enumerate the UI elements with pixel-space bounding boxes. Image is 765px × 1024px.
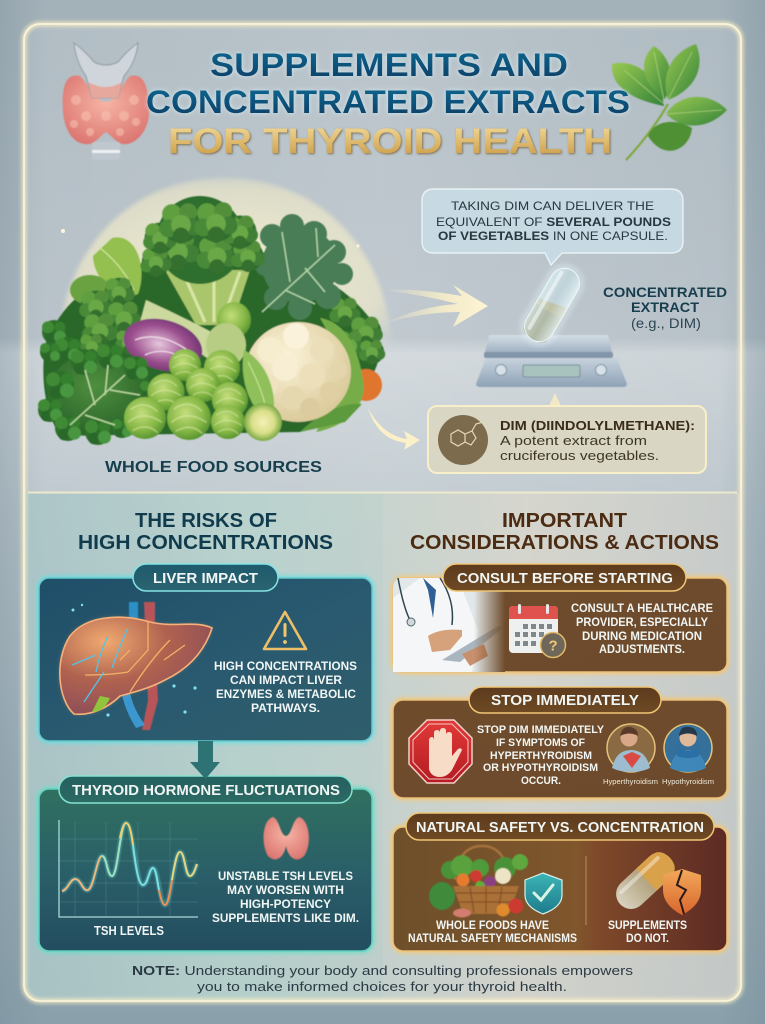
natural text: NATURAL SAFETY MECHANISMS <box>408 933 577 945</box>
heading: risks: THE RISKS OF <box>135 510 277 532</box>
consult pill: CONSULT BEFORE STARTING <box>457 571 673 587</box>
natural text <box>408 920 577 945</box>
heading: risks: HIGH CONCENTRATIONS <box>78 532 333 554</box>
stop text <box>477 724 605 787</box>
thyroid text: UNSTABLE TSH LEVELS <box>218 871 353 883</box>
consult text <box>571 603 713 656</box>
consult text: PROVIDER, ESPECIALLY <box>576 617 708 629</box>
consult pill <box>443 564 686 591</box>
stop text: IF SYMPTOMS OF <box>496 737 585 749</box>
title: SUPPLEMENTS AND <box>210 47 568 83</box>
natural pill: NATURAL SAFETY VS. CONCENTRATION <box>416 820 704 836</box>
thyroid text: MAY WORSEN WITH <box>227 885 344 897</box>
panel: natural safety vs concentration <box>393 813 727 951</box>
panel: thyroid hormone fluctuations <box>39 789 372 951</box>
concentrated extract label: (e.g., DIM) <box>631 315 701 331</box>
icon: calendar <box>509 604 566 658</box>
glow dome <box>58 178 392 350</box>
arrow: liver to thyroid <box>190 741 220 779</box>
icon: safety shield <box>525 873 562 914</box>
liver text: HIGH CONCENTRATIONS <box>214 661 357 673</box>
title <box>146 47 630 161</box>
TSH chart <box>59 820 198 917</box>
concentrated extract label: EXTRACT <box>631 299 699 315</box>
consult text: ADJUSTMENTS. <box>599 644 685 656</box>
liver impact pill <box>133 564 278 591</box>
whole food label: WHOLE FOOD SOURCES <box>105 459 322 476</box>
panel: lower right tint <box>383 493 740 1000</box>
supplements text: DO NOT. <box>626 933 669 945</box>
note: NOTE: Understanding your body and consulting professionals empowers <box>132 963 634 978</box>
natural pill <box>406 813 714 840</box>
stop text: OR HYPOTHYROIDISM <box>483 762 598 774</box>
symptom labels: Hypothyroidism <box>662 779 714 786</box>
stop text: STOP DIM IMMEDIATELY <box>477 724 605 736</box>
cauliflower <box>316 318 364 432</box>
icon: thyroid anatomy <box>63 43 149 160</box>
stop text: OCCUR. <box>521 775 561 787</box>
panel: liver impact <box>39 564 372 741</box>
icon: green leaves <box>612 44 727 160</box>
supplements text: SUPPLEMENTS <box>608 920 687 932</box>
concentrated extract label: CONCENTRATED <box>603 284 727 300</box>
speech bubble: TAKING DIM CAN DELIVER THE <box>451 199 654 213</box>
DIM callout <box>428 393 706 473</box>
section divider <box>28 492 737 494</box>
speech bubble <box>422 189 683 265</box>
sparkles <box>61 229 65 233</box>
icon: thyroid <box>264 817 309 859</box>
consult text: DURING MEDICATION <box>582 631 702 643</box>
thyroid text: HIGH-POTENCY <box>240 899 331 911</box>
icon: kitchen scale <box>476 335 627 387</box>
panel: consult before starting <box>393 564 727 672</box>
note <box>132 963 634 994</box>
heading: considerations: CONSIDERATIONS & ACTIONS <box>410 532 719 554</box>
DIM callout: cruciferous vegetables. <box>500 448 659 463</box>
symptom labels: Hyperthyroidism <box>603 779 658 786</box>
thyroid pill <box>59 776 352 803</box>
brussels sprouts <box>169 349 201 381</box>
liver text: PATHWAYS. <box>251 703 320 715</box>
heading: considerations <box>410 510 719 554</box>
supplements text <box>608 920 687 945</box>
whole food vegetables illustration <box>38 178 392 445</box>
liver impact pill: LIVER IMPACT <box>153 571 258 587</box>
carrot <box>350 369 382 401</box>
natural text: WHOLE FOODS HAVE <box>436 920 549 932</box>
icon: broken shield <box>663 869 701 915</box>
stop text: HYPERTHYROIDISM <box>490 750 592 762</box>
liver text <box>214 661 357 715</box>
heading: considerations: IMPORTANT <box>502 510 627 532</box>
title: CONCENTRATED EXTRACTS <box>146 84 630 120</box>
thyroid pill: THYROID HORMONE FLUCTUATIONS <box>72 783 340 799</box>
panel: stop immediately <box>393 687 727 798</box>
icon: hypothyroidism person <box>664 724 712 772</box>
speech bubble: EQUIVALENT OF SEVERAL POUNDS <box>436 215 671 229</box>
thyroid text <box>212 871 359 925</box>
icon: calendar: ? <box>548 638 558 654</box>
thyroid text: SUPPLEMENTS LIKE DIM. <box>212 913 359 925</box>
icon: DIM molecule <box>438 415 488 465</box>
concentrated extract label <box>603 284 727 331</box>
panel divider <box>586 856 587 925</box>
icon: warning triangle <box>264 612 306 649</box>
speech bubble: OF VEGETABLES IN ONE CAPSULE. <box>438 229 668 243</box>
icon: supplement capsule <box>610 847 680 915</box>
DIM callout: A potent extract from <box>500 433 647 448</box>
curved arrow: vegetables to DIM <box>368 408 420 450</box>
note: you to make informed choices for your thyroid health. <box>197 979 567 994</box>
icon: hyperthyroidism person <box>607 724 655 772</box>
stop pill: STOP IMMEDIATELY <box>491 693 639 709</box>
panel: lower left tint <box>25 493 383 1000</box>
doctor photo <box>393 578 505 672</box>
icon: stop hand <box>409 720 472 783</box>
title: FOR THYROID HEALTH <box>168 122 612 161</box>
liver text: ENZYMES & METABOLIC <box>216 689 356 701</box>
arrow: vegetables to capsule <box>380 285 488 327</box>
DIM callout: DIM (DIINDOLYLMETHANE): <box>500 418 695 433</box>
heading: risks <box>78 510 333 554</box>
liver text: CAN IMPACT LIVER <box>230 675 343 687</box>
broccoli and greens <box>38 196 385 445</box>
icon: food basket <box>429 846 528 918</box>
icon: liver <box>60 602 212 730</box>
TSH label: TSH LEVELS <box>94 924 164 938</box>
symptom labels <box>603 779 714 786</box>
consult text: CONSULT A HEALTHCARE <box>571 603 713 615</box>
icon: capsule <box>512 256 592 354</box>
stop pill <box>469 687 661 713</box>
